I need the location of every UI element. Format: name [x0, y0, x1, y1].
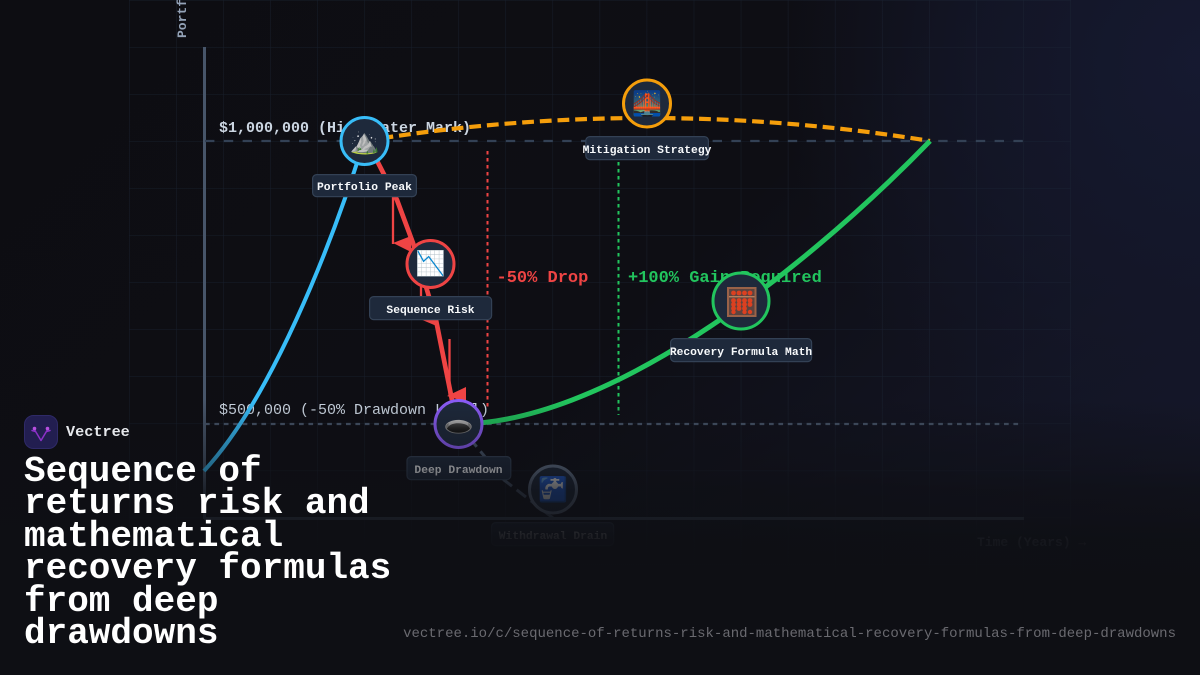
node: Sequence Risk: 📉 [416, 250, 445, 278]
title: returns risk and [24, 483, 370, 524]
gain label: +100% Gain Required [628, 269, 822, 288]
title: recovery formulas [24, 548, 391, 589]
brand: Vectree [66, 423, 130, 441]
icon: abacus [727, 287, 756, 317]
title: Sequence of [24, 451, 262, 492]
curve: withdrawal drain [458, 424, 553, 518]
node: Portfolio Peak [313, 118, 416, 197]
title: mathematical [24, 516, 283, 557]
curve: rise to peak [204, 141, 364, 471]
curve: sequence risk drop [367, 141, 466, 402]
node: Withdrawal Drain [492, 466, 614, 546]
node: Withdrawal Drain: 🚰 [538, 476, 568, 504]
node: Recovery Formula Math: Recovery Formula Math [670, 347, 812, 359]
curve: recovery [458, 141, 930, 424]
node: Deep Drawdown: Deep Drawdown [414, 465, 503, 477]
curve: mitigation path [364, 118, 930, 141]
node: Sequence Risk: Sequence Risk [386, 305, 475, 317]
node: Mitigation Strategy: 🌉 [632, 90, 662, 118]
node: Portfolio Peak: Portfolio Peak [317, 182, 412, 194]
drawdown level label: $500,000 (-50% Drawdown Level) [219, 402, 489, 419]
node: Withdrawal Drain: Withdrawal Drain [499, 531, 607, 543]
red drop marker [486, 151, 488, 408]
high water mark label: $1,000,000 (High Water Mark) [219, 120, 471, 137]
title [24, 451, 391, 654]
drawdown level line [205, 423, 1020, 425]
title: from deep [24, 581, 218, 622]
icon: Vectree logo [24, 415, 58, 449]
x axis label: Time (Years) → [977, 535, 1086, 550]
node: Mitigation Strategy: Mitigation Strategy [583, 145, 712, 157]
source url: vectree.io/c/sequence-of-returns-risk-and-mathematical-recovery-formulas-from-deep-drawdowns [403, 626, 1176, 642]
drop label: -50% Drop [496, 269, 588, 288]
x axis [204, 517, 1024, 520]
node: Portfolio Peak: ⛰️ [350, 128, 379, 156]
node: Deep Drawdown: 🕳️ [441, 409, 477, 437]
green gain marker [618, 162, 620, 415]
brand [24, 415, 130, 449]
high water mark line [205, 140, 1024, 142]
node: Recovery Formula Math [670, 273, 812, 362]
node: Sequence Risk [370, 240, 492, 320]
node: Deep Drawdown [407, 400, 511, 480]
node: Mitigation Strategy [583, 80, 712, 160]
title: drawdowns [24, 613, 218, 654]
y axis [203, 47, 206, 519]
